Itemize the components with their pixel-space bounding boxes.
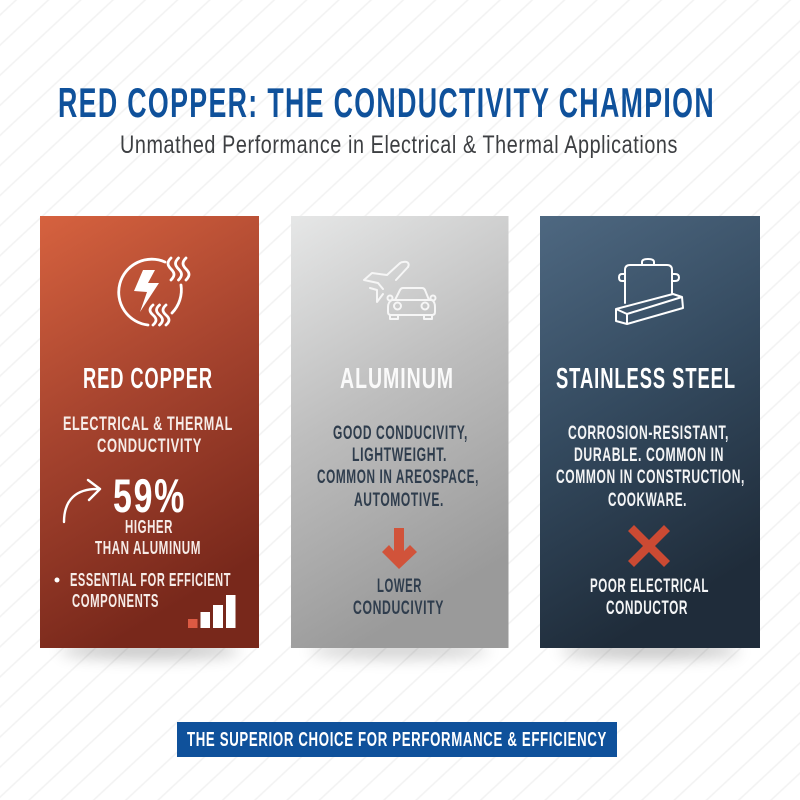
text: lower conductivity: LOWER: [377, 576, 422, 597]
panel: aluminum: [291, 216, 508, 658]
arrow: down: [382, 528, 417, 569]
icon: bar chart: [188, 595, 236, 628]
bullet text: COMPONENTS: [72, 590, 159, 611]
text: electrical and thermal conductivity: CONDUCTIVITY: [97, 436, 202, 457]
text: electrical and thermal conductivity: [63, 414, 233, 457]
text: poor electrical conductor: [590, 576, 709, 619]
text: poor electrical conductor: CONDUCTOR: [606, 598, 688, 619]
text: higher than aluminum: THAN ALUMINUM: [95, 538, 201, 558]
text: aluminum description: LIGHTWEIGHT.: [352, 445, 447, 466]
heading: red copper: RED COPPER: [83, 363, 213, 395]
text: poor electrical conductor: POOR ELECTRICAL: [590, 576, 709, 597]
text: aluminum description: AUTOMOTIVE.: [354, 490, 444, 511]
text: lower conductivity: [353, 576, 444, 619]
bullet text: [54, 569, 231, 611]
text: stainless description: COOKWARE.: [608, 490, 687, 511]
arrow: curved up: [64, 480, 100, 522]
icon: lightning with heat waves: [119, 258, 189, 325]
stat: 59 percent: 59%: [113, 469, 186, 522]
text: aluminum description: [317, 423, 479, 511]
panel: stainless steel: [540, 216, 760, 658]
panel: red copper: [40, 216, 259, 658]
icon: plane and car: [364, 262, 436, 319]
text: higher than aluminum: HIGHER: [125, 517, 173, 537]
banner: [177, 722, 617, 757]
icon: red cross: [628, 525, 670, 567]
text: aluminum description: GOOD CONDUCIVITY,: [333, 423, 468, 444]
text: higher than aluminum: [95, 517, 201, 558]
bullet text: ESSENTIAL FOR EFFICIENT: [70, 569, 231, 590]
text: aluminum description: COMMON IN AREOSPACE,: [317, 467, 479, 488]
heading: aluminum: ALUMINUM: [340, 363, 454, 395]
icon: pot and beam: [616, 259, 683, 324]
text: electrical and thermal conductivity: ELECTRICAL & THERMAL: [63, 414, 233, 435]
text: stainless description: [556, 423, 745, 511]
text: lower conductivity: CONDUCIVITY: [353, 598, 444, 619]
